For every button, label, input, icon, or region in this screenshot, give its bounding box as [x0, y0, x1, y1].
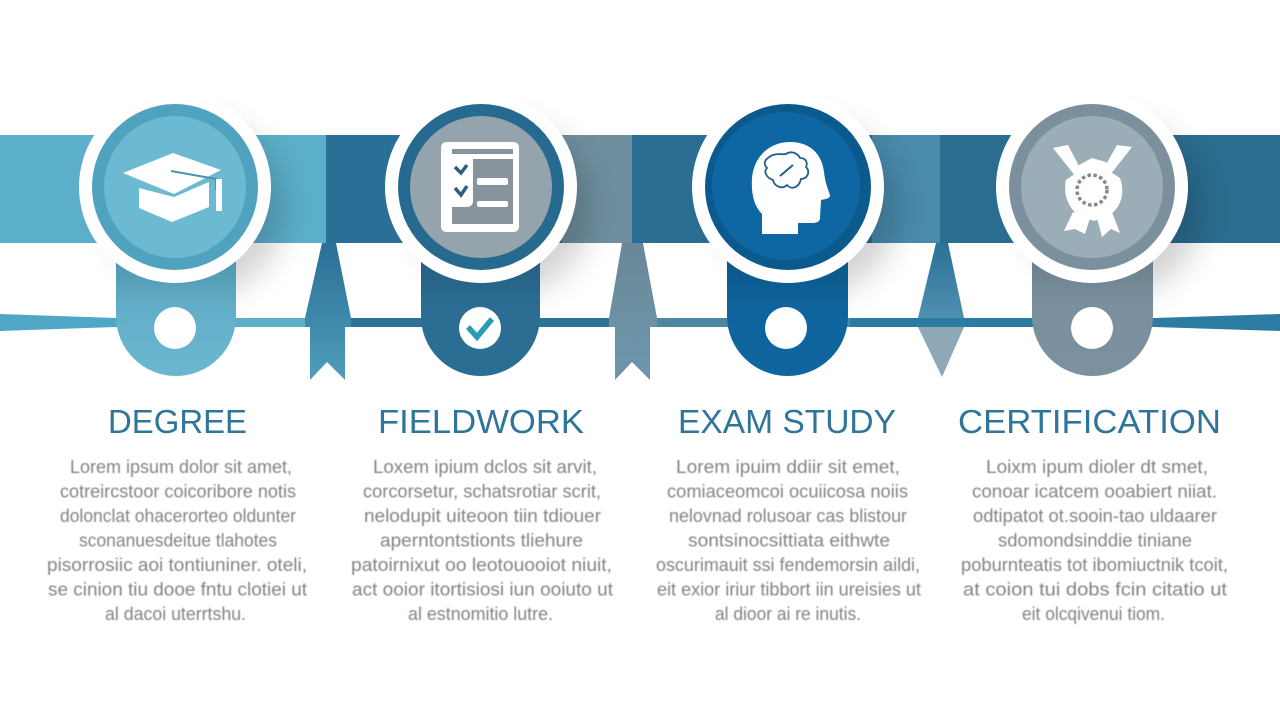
- ribbon connector 3: [918, 243, 964, 377]
- text block: exam study: sontsinocsittiata eithwte: [688, 530, 890, 550]
- text block: degree: sconanuesdeitue tlahotes: [79, 530, 277, 550]
- text block: degree: cotreircstoor coicoribore notis: [60, 480, 296, 502]
- text block: fieldwork: corcorsetur, schatsrotiar scrit,: [363, 480, 601, 502]
- text block: exam study: eit exior iriur tibbort iin ureisies ut: [657, 578, 921, 600]
- text block: degree: al dacoi uterrtshu.: [105, 603, 246, 624]
- icon: graduation cap: [123, 153, 222, 222]
- icon: head with brain: [752, 142, 830, 234]
- tab 4 hole: [1071, 307, 1113, 349]
- text block: degree: dolonclat ohacerorteo oldunter: [60, 505, 296, 526]
- text block: exam study: comiaceomcoi ocuiicosa noiis: [667, 480, 908, 502]
- text block: exam study: al dioor ai re inutis.: [715, 603, 861, 624]
- tab 4: [1032, 260, 1153, 376]
- text block: certification: conoar icatcem ooabiert niiat.: [972, 480, 1217, 502]
- ribbon connector 2: [609, 243, 657, 380]
- ribbon connector 1: [305, 243, 351, 380]
- text block: certification: sdomondsinddie tiniane: [998, 530, 1192, 550]
- text block: degree: se cinion tiu dooe fntu clotiei ut: [48, 578, 307, 600]
- step 2: fieldwork badge: [385, 91, 577, 376]
- top ribbon band: [0, 135, 1280, 243]
- text block: certification: Loixm ipum dioler dt smet,: [986, 456, 1208, 477]
- text block: fieldwork: act ooior itortisiosi iun ooiuto ut: [352, 578, 613, 600]
- tab 2: [421, 260, 540, 376]
- circle 2: [385, 91, 577, 283]
- icon: award rosette: [1053, 145, 1132, 237]
- text block: degree: Lorem ipsum dolor sit amet,: [70, 456, 292, 477]
- heading: certification: CERTIFICATION: [958, 403, 1221, 440]
- connector line: [0, 314, 1280, 331]
- text block: exam study: oscurimauit ssi fendemorsin aildi,: [656, 554, 920, 575]
- text block: exam study: Lorem ipuim ddiir sit emet,: [676, 456, 900, 477]
- text block: certification: odtipatot ot.sooin-tao uldaarer: [973, 505, 1217, 526]
- circle 3: [692, 91, 884, 283]
- heading: exam study: EXAM STUDY: [678, 403, 896, 440]
- text block: fieldwork: al estnomitio lutre.: [408, 603, 553, 624]
- heading: degree: DEGREE: [108, 403, 247, 440]
- circle 1: [79, 91, 271, 283]
- text block: certification: at coion tui dobs fcin citatio ut: [963, 578, 1227, 600]
- text block: fieldwork: nelodupit uiteoon tiin tdiouer: [364, 505, 601, 526]
- text block: certification: poburnteatis tot ibomiuctnik tcoit,: [961, 554, 1228, 575]
- text block: fieldwork: aperntontstionts tliehure: [380, 530, 583, 550]
- text block: certification: eit olcqivenui tiom.: [1022, 603, 1165, 624]
- heading: fieldwork: FIELDWORK: [378, 403, 584, 440]
- circle 4: [996, 91, 1188, 283]
- text block: fieldwork: [351, 456, 613, 624]
- tab 2 check: [459, 307, 501, 349]
- text block: exam study: [656, 456, 921, 624]
- text block: exam study: nelovnad rolusoar cas blistour: [669, 505, 907, 526]
- step 3: exam study badge: [692, 91, 884, 376]
- tab 1 hole: [154, 307, 196, 349]
- tab 1: [116, 260, 236, 376]
- text block: certification: [961, 456, 1228, 624]
- tab 3: [727, 260, 848, 376]
- step 1: degree badge: [79, 91, 271, 376]
- text block: fieldwork: Loxem ipium dclos sit arvit,: [373, 456, 597, 477]
- tab 3 hole: [765, 307, 807, 349]
- text block: degree: pisorrosiic aoi tontiuniner. oteli,: [47, 554, 307, 575]
- text block: degree: [47, 456, 307, 624]
- icon: checklist: [441, 142, 519, 232]
- step 4: certification badge: [996, 91, 1188, 376]
- text block: fieldwork: patoirnixut oo leotouooiot niuit,: [351, 554, 612, 575]
- circle drop shadows: [110, 120, 1203, 296]
